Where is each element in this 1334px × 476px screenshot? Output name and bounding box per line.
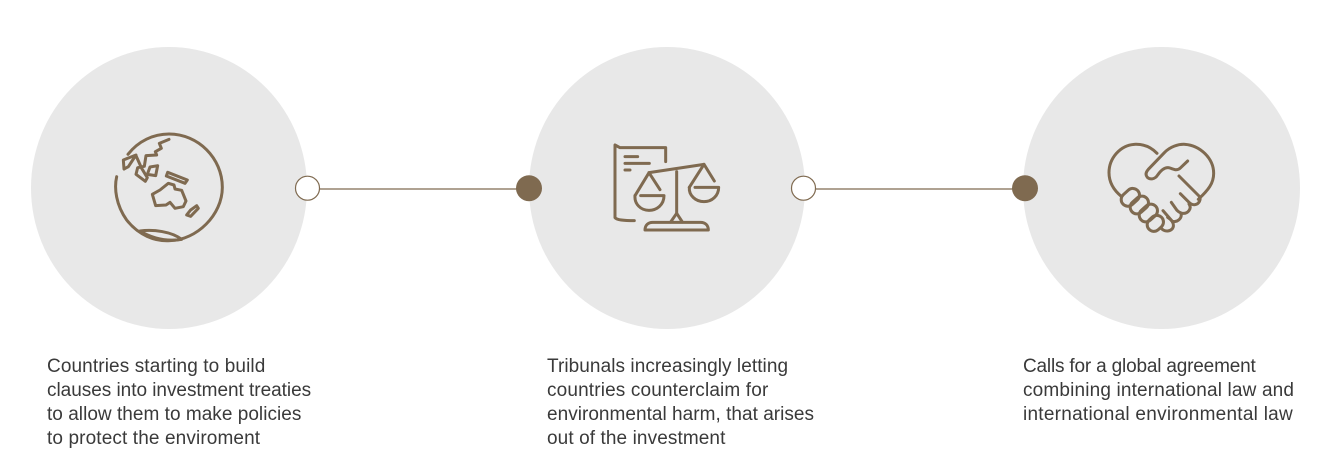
text block: tribunals counterclaim: out of the investment xyxy=(547,428,725,449)
icon: globe xyxy=(116,134,222,241)
text block: tribunals counterclaim xyxy=(547,356,814,449)
text block: tribunals counterclaim: environmental harm, that arises xyxy=(547,404,814,425)
panel: circle 1 xyxy=(31,47,307,329)
text block: global agreement: international environmental law xyxy=(1023,404,1293,425)
text block: clauses in treaties: to protect the enviroment xyxy=(47,428,260,449)
icon: scales of justice and document xyxy=(615,145,719,230)
text block: global agreement: Calls for a global agreement xyxy=(1023,356,1256,377)
text block: clauses in treaties: to allow them to make policies xyxy=(47,404,301,425)
text block: tribunals counterclaim: Tribunals increasingly letting xyxy=(547,356,788,377)
icon: handshake heart xyxy=(1109,144,1214,234)
panel: circle 2 xyxy=(529,47,805,329)
text block: clauses in treaties: clauses into investment treaties xyxy=(47,380,311,401)
text block: global agreement xyxy=(1023,356,1294,425)
text block: global agreement: combining international law and xyxy=(1023,380,1294,401)
text block: tribunals counterclaim: countries counterclaim for xyxy=(547,380,768,401)
connector: first to second xyxy=(296,175,542,201)
text block: clauses in treaties: Countries starting to build xyxy=(47,356,265,377)
text block: clauses in treaties xyxy=(47,356,311,449)
connector: second to third xyxy=(792,175,1038,201)
panel: circle 3 xyxy=(1023,47,1300,329)
